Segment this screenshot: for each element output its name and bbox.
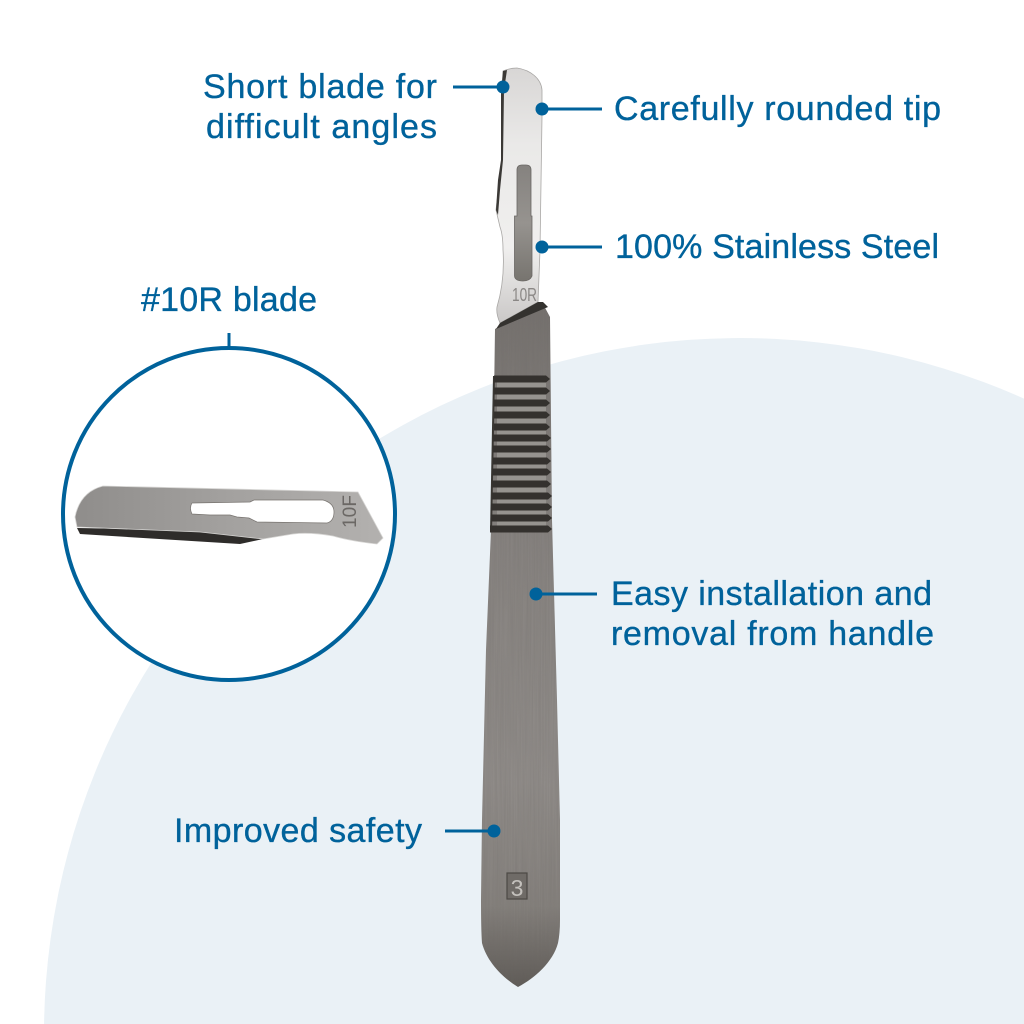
handle grip ribs [490, 376, 552, 532]
panel: #10R blade inset [63, 281, 395, 680]
callout: improved safety: Improved safety [174, 812, 422, 850]
blade marking 10R: 10R [512, 285, 537, 305]
handle size stamp 3: 3 [511, 875, 523, 901]
callout: short blade [203, 68, 510, 146]
heading text: short blade: Short blade for [203, 68, 437, 106]
handle size stamp 3 [507, 873, 527, 901]
heading text: short blade: difficult angles [206, 108, 437, 146]
inset blade image [75, 486, 383, 544]
inset title: #10R blade [141, 281, 317, 319]
callout: easy installation: removal from handle [611, 615, 934, 653]
inset blade marking: 10F [340, 495, 361, 528]
scalpel illustration [478, 68, 563, 990]
background circle [44, 338, 1024, 1024]
callout: easy installation: Easy installation and [611, 575, 932, 613]
scalpel blade [496, 68, 542, 323]
heading text: short blade [203, 68, 437, 146]
callout: rounded tip: Carefully rounded tip [614, 90, 941, 128]
scalpel handle [478, 300, 563, 990]
callout: easy installation [530, 575, 934, 653]
callout: stainless steel: 100% Stainless Steel [615, 228, 939, 266]
